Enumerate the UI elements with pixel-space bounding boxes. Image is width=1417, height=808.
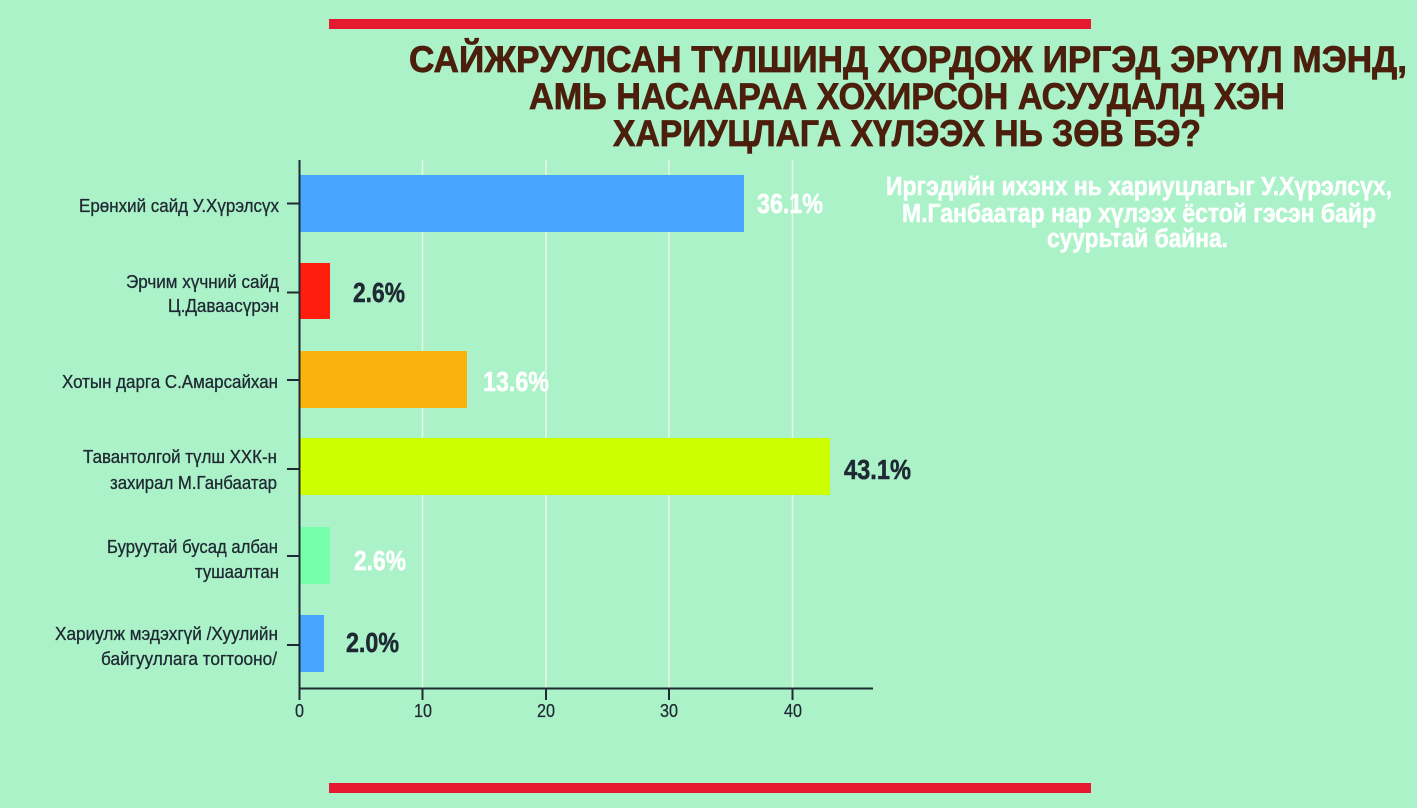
axes xyxy=(287,160,873,700)
title xyxy=(409,38,1407,154)
bottom red bar xyxy=(329,783,1091,793)
category labels: Тавантолгой түлш ХХК-н xyxy=(83,447,277,467)
commentary text: М.Ганбаатар нар хүлээх ёстой гэсэн байр xyxy=(902,200,1376,228)
x axis labels: 30 xyxy=(660,701,678,721)
commentary text: суурьтай байна. xyxy=(1047,225,1228,253)
value labels: 43.1% xyxy=(844,454,911,485)
category labels xyxy=(55,196,279,669)
value labels: 2.6% xyxy=(354,545,406,576)
x axis labels: 10 xyxy=(414,701,432,721)
category labels: Ерөнхий сайд У.Хүрэлсүх xyxy=(79,196,279,216)
bar: don't know xyxy=(300,615,324,672)
top red bar xyxy=(329,19,1091,29)
value labels: 13.6% xyxy=(483,366,549,397)
category labels: захирал М.Ганбаатар xyxy=(110,473,277,493)
bar chart xyxy=(55,160,911,721)
category labels: Ц.Даваасүрэн xyxy=(168,296,279,316)
title: АМЬ НАСААРАА ХОХИРСОН АСУУДАЛД ХЭН xyxy=(529,76,1285,117)
category labels: тушаалтан xyxy=(195,562,279,582)
x axis labels xyxy=(295,701,802,721)
bar: Energy Minister xyxy=(300,263,330,319)
bar: City Mayor xyxy=(300,351,467,408)
value labels: 2.6% xyxy=(353,277,405,308)
title: ХАРИУЦЛАГА ХҮЛЭЭХ НЬ ЗӨВ БЭ? xyxy=(613,113,1201,154)
bar: Tavantolgoi director xyxy=(300,438,830,495)
x axis labels: 20 xyxy=(537,701,555,721)
bar: other officials xyxy=(300,527,330,584)
category labels: Эрчим хүчний сайд xyxy=(126,272,279,292)
category labels: Хотын дарга С.Амарсайхан xyxy=(62,372,278,392)
x axis labels: 0 xyxy=(295,701,304,721)
value labels xyxy=(346,188,911,658)
category labels: Хариулж мэдэхгүй /Хуулийн xyxy=(55,624,278,644)
commentary text xyxy=(886,173,1392,253)
bar: Prime Minister xyxy=(300,175,744,232)
value labels: 2.0% xyxy=(346,627,399,658)
category labels: байгууллага тогтооно/ xyxy=(101,649,277,669)
category labels: Буруутай бусад албан xyxy=(107,537,278,557)
value labels: 36.1% xyxy=(757,188,823,219)
x axis labels: 40 xyxy=(784,701,802,721)
